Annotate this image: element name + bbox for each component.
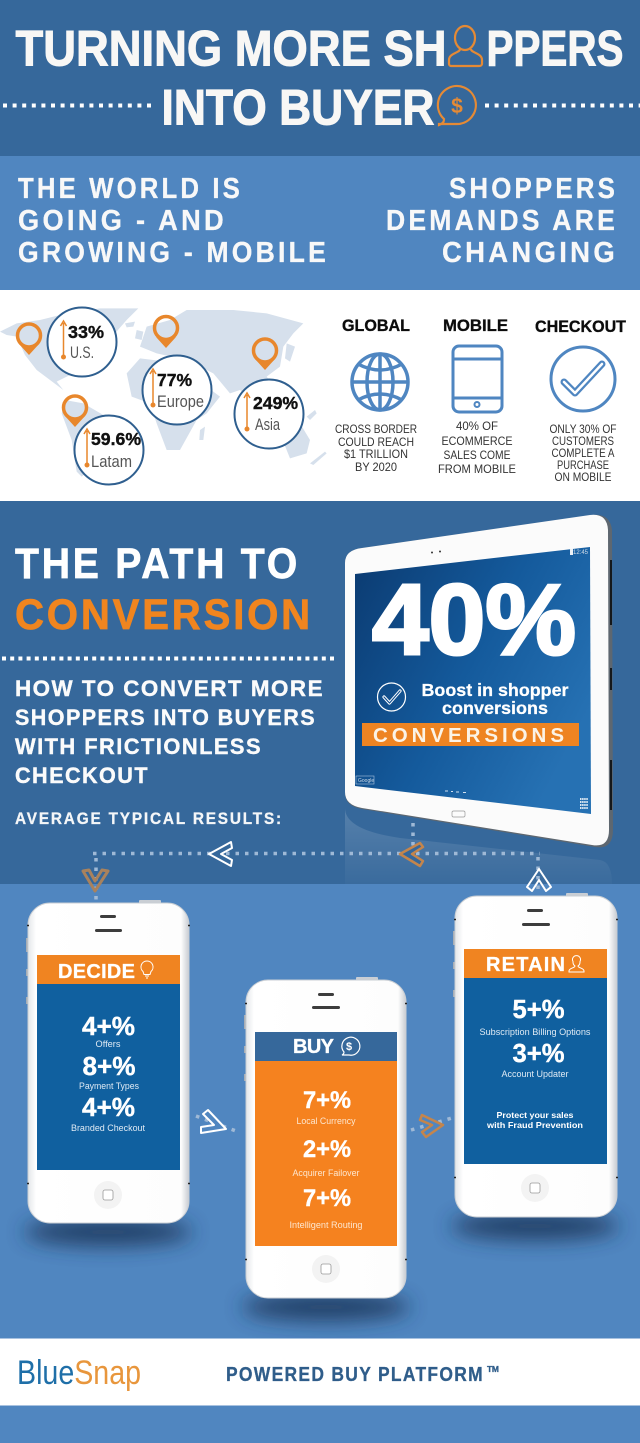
subheading: how to convert: WITH FRICTIONLESS — [15, 734, 262, 759]
decide stats: 4+% — [82, 1011, 135, 1041]
footer tagline: TM — [487, 1364, 499, 1374]
column: mobile: 40% OF — [456, 419, 498, 433]
map pins — [18, 316, 276, 427]
dotted rule — [2, 656, 335, 660]
stat circle: Latam: Latam — [91, 452, 132, 471]
title — [16, 20, 624, 136]
buy header: BUY — [293, 1036, 335, 1058]
retain stats: with Fraud Prevention — [486, 1120, 583, 1130]
buy header: $ — [346, 1041, 352, 1053]
stat circle: U.S.: 33% — [68, 322, 104, 342]
column: global: CROSS BORDER — [335, 422, 417, 436]
heading: the world is going mobile: GROWING - MOBILE — [18, 237, 329, 269]
arrow: right white — [201, 1110, 226, 1133]
boost caption — [422, 680, 569, 718]
heading: shoppers demands are changing: SHOPPERS — [449, 173, 618, 205]
buy stats: 2+% — [303, 1136, 351, 1163]
column: global: BY 2020 — [355, 460, 397, 474]
icon: check circle — [551, 347, 615, 411]
arrow: down orange — [83, 870, 108, 891]
retain stats: 3+% — [512, 1038, 564, 1068]
heading: the world is going mobile: THE WORLD IS — [18, 173, 243, 205]
arrow: left orange — [400, 843, 423, 866]
column: checkout: CHECKOUT — [535, 317, 627, 336]
icon: tablet — [453, 346, 502, 412]
decide stats: 8+% — [82, 1051, 136, 1081]
column: mobile — [438, 316, 516, 476]
buy stats: Local Currency — [296, 1116, 356, 1126]
heading: the path to conversion — [15, 540, 313, 639]
retain stats — [464, 978, 607, 1164]
stat circle: Europe: 77% — [157, 370, 192, 390]
buy stats: Intelligent Routing — [290, 1220, 362, 1230]
column: global: $1 TRILLION — [344, 447, 408, 461]
decide stats: 4+% — [82, 1092, 135, 1122]
conversions band: CONVERSIONS — [373, 724, 564, 747]
retain stats: Protect your sales — [496, 1110, 574, 1120]
retain header: RETAIN — [486, 954, 565, 976]
retain header — [464, 949, 607, 978]
heading: the path to conversion: THE PATH TO — [15, 540, 300, 588]
column: checkout: ONLY 30% OF — [550, 424, 616, 436]
column: checkout: ON MOBILE — [554, 472, 612, 484]
stat circle: Asia: 249% — [253, 393, 298, 413]
subheading: how to convert: HOW TO CONVERT MORE — [15, 676, 324, 701]
column: mobile: SALES COME — [444, 448, 510, 462]
decide header — [37, 955, 180, 984]
tablet reflection — [345, 808, 612, 884]
phone: buy — [242, 977, 410, 1321]
stat circle: U.S.: U.S. — [70, 343, 94, 362]
icon: dollar speech bubble: $ — [451, 95, 463, 118]
buy header — [255, 1032, 397, 1061]
subheading: how to convert: CHECKOUT — [15, 763, 149, 788]
column: checkout: COMPLETE A — [552, 448, 615, 460]
column: checkout: PURCHASE — [557, 460, 609, 472]
decide stats — [37, 984, 180, 1170]
subheading: how to convert: SHOPPERS INTO BUYERS — [15, 705, 316, 730]
arrow: right orange — [420, 1115, 443, 1137]
stat circle: Latam: 59.6% — [91, 429, 141, 449]
buy stats — [255, 1061, 397, 1246]
column: global — [335, 316, 417, 474]
tablet — [345, 515, 613, 847]
stat circle: Latam — [74, 416, 144, 484]
phone: decide — [24, 900, 192, 1246]
icon: dollar speech bubble — [438, 86, 476, 125]
world map — [0, 308, 327, 477]
footer band — [0, 1338, 640, 1406]
column: mobile: FROM MOBILE — [438, 462, 516, 476]
heading: shoppers demands are changing — [386, 173, 618, 269]
tablet: 12:45 — [573, 550, 589, 556]
stat circle: U.S. — [48, 308, 116, 376]
heading: shoppers demands are changing: CHANGING — [442, 237, 618, 269]
arrow: left white — [209, 842, 232, 866]
decide stats: Offers — [96, 1039, 121, 1049]
column: global: COULD REACH — [338, 435, 414, 449]
stat circle: Asia — [234, 380, 304, 448]
icon: globe — [352, 354, 408, 410]
column: mobile: ECOMMERCE — [442, 434, 512, 448]
title: INTO BUYER — [162, 80, 434, 136]
route dotted connectors — [93, 823, 540, 1131]
decide stats: Branded Checkout — [71, 1123, 145, 1133]
phone: retain — [451, 893, 619, 1240]
buy stats: 7+% — [303, 1185, 351, 1212]
boost caption: Boost in shopper — [422, 680, 569, 700]
column: checkout — [535, 317, 627, 484]
stat circle: Asia: Asia — [255, 415, 280, 434]
stat circle: Europe: Europe — [157, 392, 204, 411]
retain stats: Subscription Billing Options — [480, 1027, 591, 1037]
heading: the world is going mobile: GOING - AND — [18, 205, 227, 237]
icon: shopper — [449, 26, 482, 66]
tablet: Google — [358, 778, 374, 784]
decide header: DECIDE — [58, 961, 135, 983]
column: global: GLOBAL — [342, 316, 410, 335]
heading: the world is going mobile — [18, 173, 329, 269]
heading: the path to conversion: CONVERSION — [15, 591, 313, 639]
dotted title rules — [3, 104, 640, 108]
check icon — [378, 683, 406, 711]
column: checkout: CUSTOMERS — [552, 436, 614, 448]
buy stats: Acquirer Failover — [292, 1168, 360, 1178]
arrow: up white — [527, 869, 551, 891]
buy stats: 7+% — [303, 1087, 351, 1114]
boost caption: conversions — [442, 698, 548, 718]
stat circle: Europe — [142, 356, 212, 424]
big 40%: 40% — [372, 564, 576, 676]
decide stats: Payment Types — [79, 1081, 139, 1091]
title: TURNING MORE SH — [16, 20, 446, 76]
tablet screen — [355, 547, 591, 814]
heading: shoppers demands are changing: DEMANDS ARE — [386, 205, 618, 237]
retain stats: 5+% — [512, 994, 564, 1024]
average typical results label: AVERAGE TYPICAL RESULTS: — [15, 809, 283, 828]
subheading: how to convert — [15, 676, 324, 788]
logo: BlueSnap: BlueSnap — [17, 1354, 141, 1392]
footer tagline: POWERED BUY PLATFORM — [226, 1364, 484, 1386]
column: mobile: MOBILE — [443, 316, 508, 335]
retain stats: Account Updater — [502, 1069, 568, 1079]
